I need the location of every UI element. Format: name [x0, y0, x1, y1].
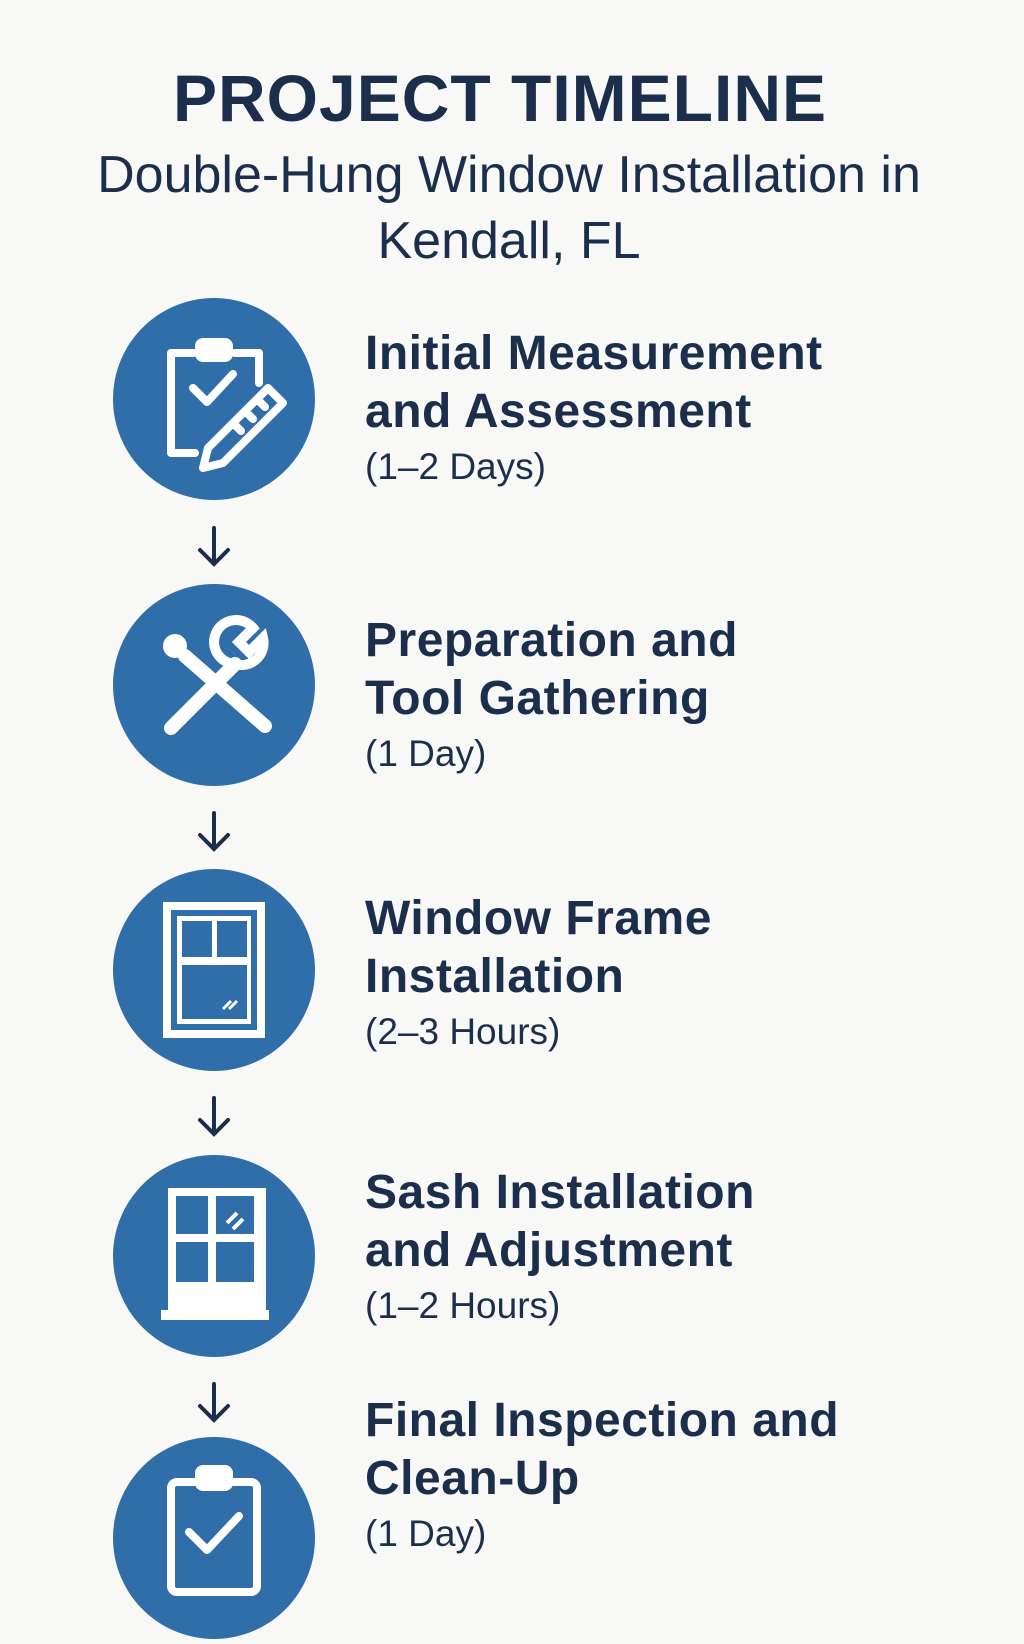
step 1 text: and Assessment: [365, 385, 752, 438]
arrow 3: [198, 1096, 230, 1137]
step 4 icon: sash window: [113, 1155, 315, 1357]
step 5 text: Final Inspection and: [365, 1394, 839, 1447]
step 3 icon: window frame: [113, 869, 315, 1071]
step 5 text: (1 Day): [365, 1513, 486, 1554]
step 3 text: (2–3 Hours): [365, 1011, 560, 1052]
step 4 text: [365, 1166, 755, 1326]
arrow 4: [198, 1382, 230, 1423]
step 1 text: [365, 327, 823, 487]
step 2 text: [365, 614, 738, 774]
subtitle: Kendall, FL: [377, 212, 641, 270]
subtitle: [97, 146, 921, 270]
step 5 text: Clean-Up: [365, 1452, 580, 1505]
step 4 text: (1–2 Hours): [365, 1285, 560, 1326]
step 3 text: [365, 892, 712, 1052]
arrow 1: [198, 526, 230, 567]
step 3 text: Installation: [365, 950, 624, 1003]
step 5 text: [365, 1394, 839, 1554]
step 1 text: (1–2 Days): [365, 446, 546, 487]
step 2 text: (1 Day): [365, 733, 486, 774]
step 3 text: Window Frame: [365, 892, 712, 945]
step 2 text: Tool Gathering: [365, 672, 710, 725]
step 1 text: Initial Measurement: [365, 327, 823, 380]
step 2 text: Preparation and: [365, 614, 738, 667]
title: PROJECT TIMELINE: [173, 61, 827, 135]
step 4 text: and Adjustment: [365, 1224, 733, 1277]
step 2 icon: tools: [113, 584, 315, 786]
arrow 2: [198, 811, 230, 852]
step 1 icon: clipboard and ruler: [113, 298, 315, 500]
step 5 icon: clipboard check: [113, 1437, 315, 1639]
step 4 text: Sash Installation: [365, 1166, 755, 1219]
subtitle: Double-Hung Window Installation in: [97, 146, 921, 204]
